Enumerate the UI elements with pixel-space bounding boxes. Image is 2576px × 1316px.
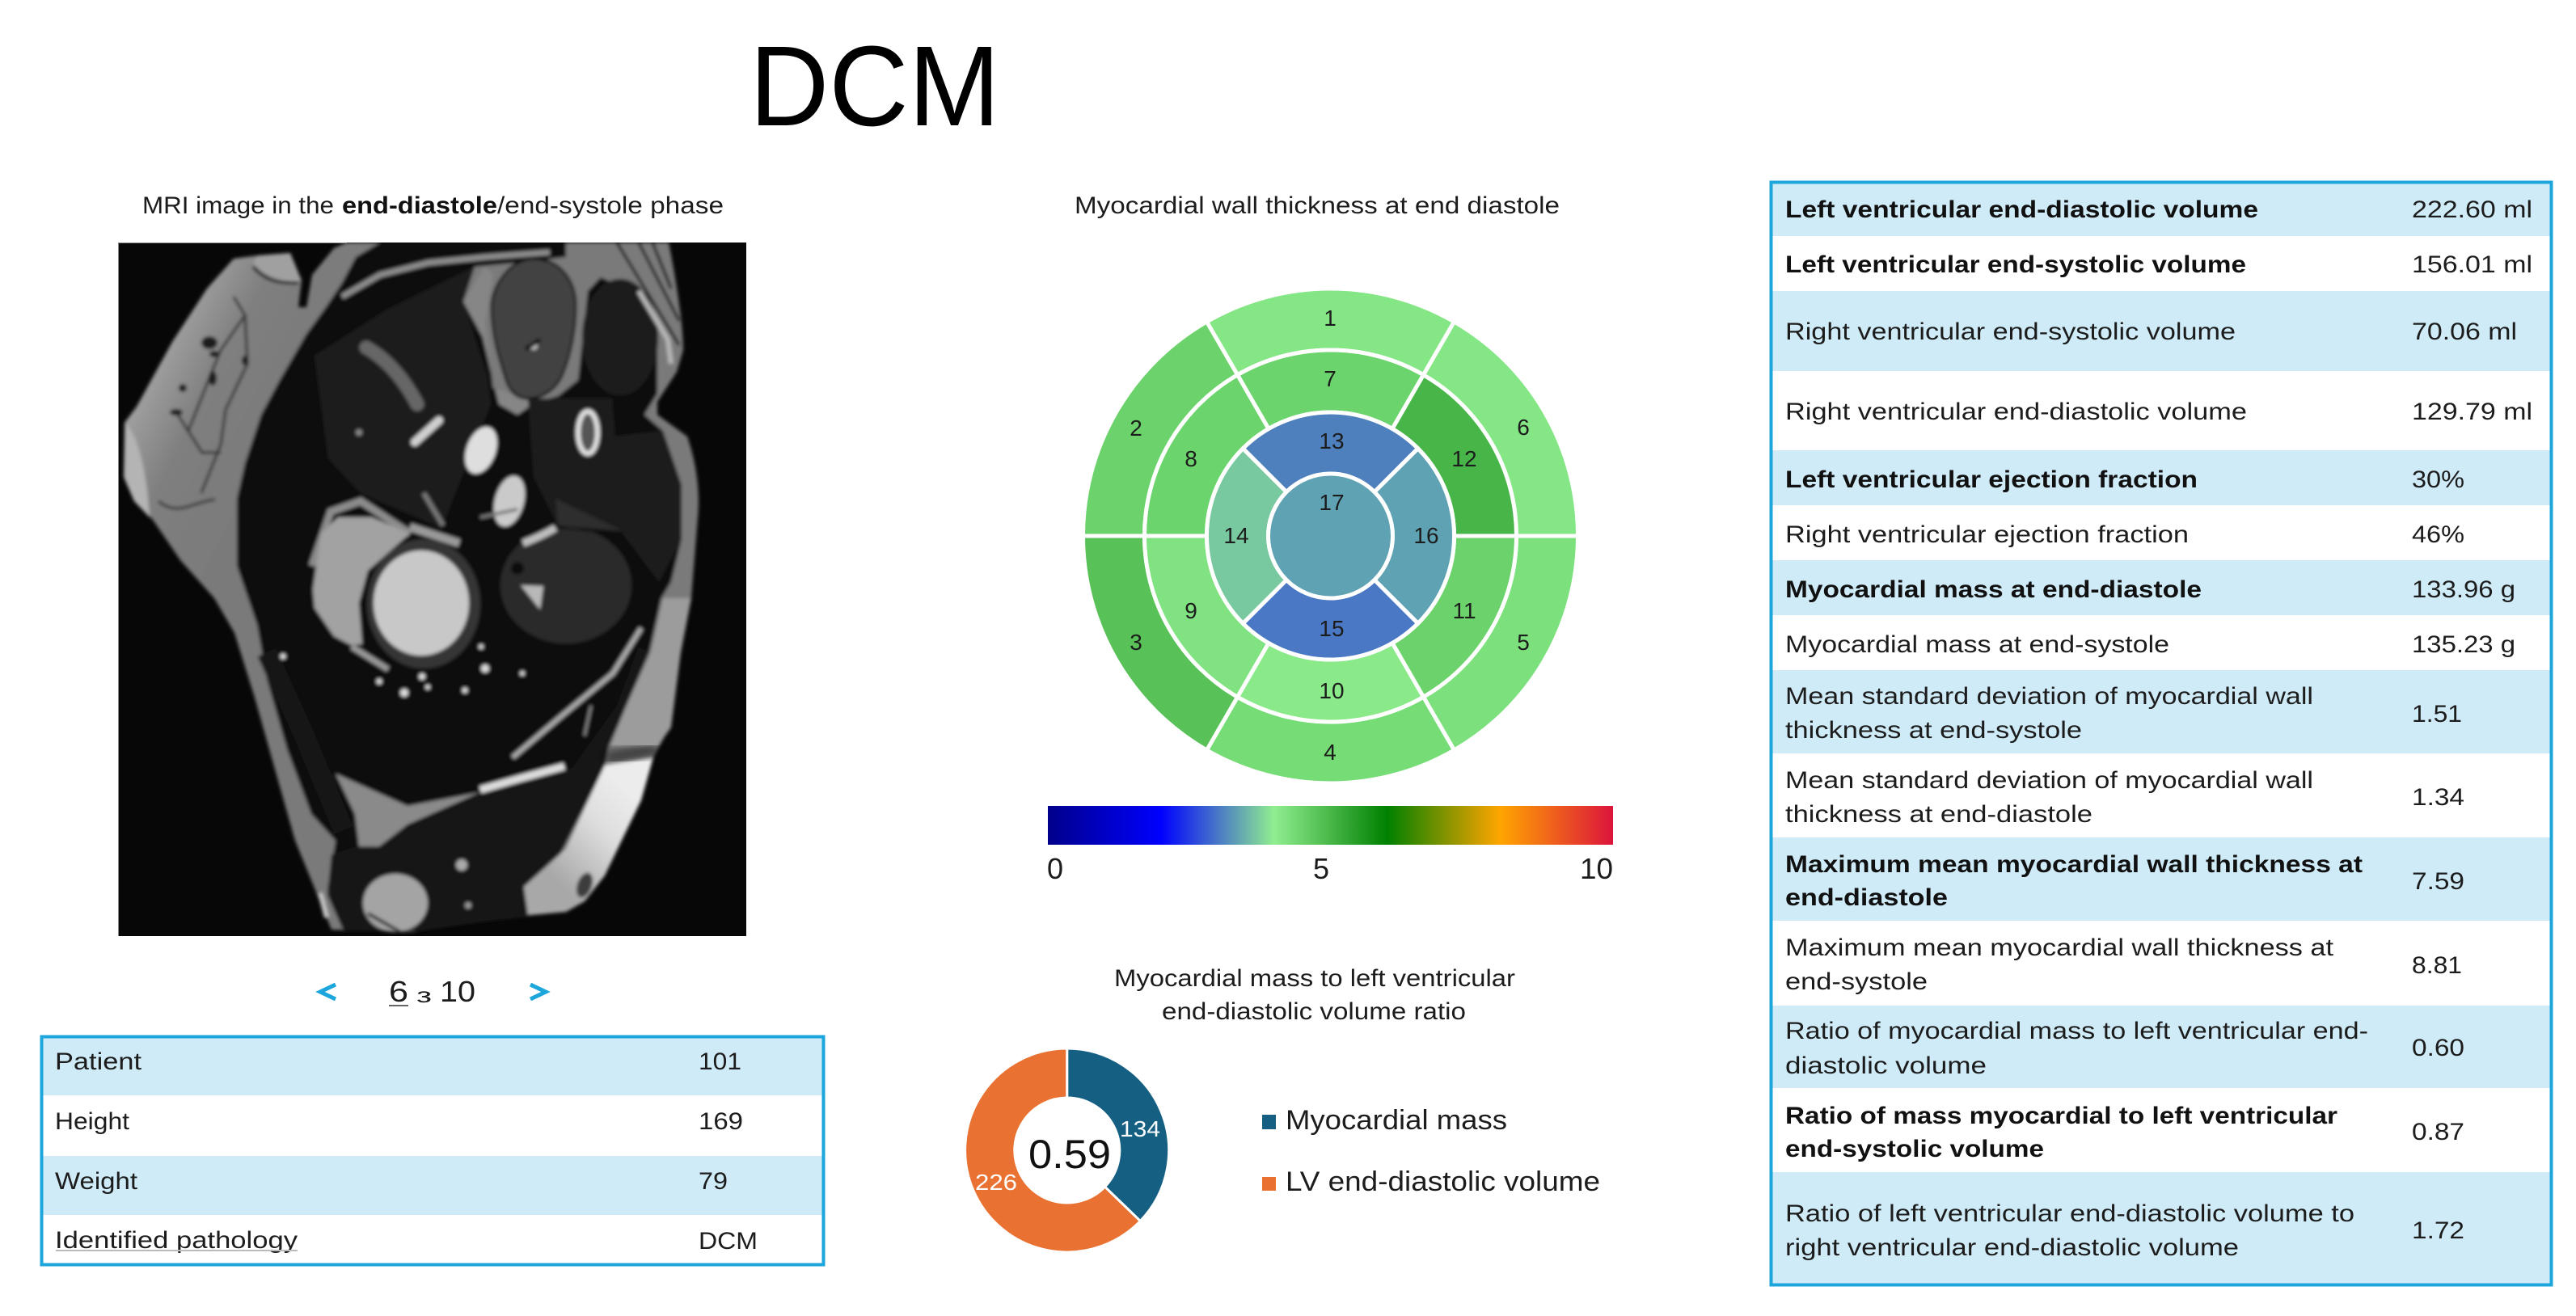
patient table: Height [55, 1108, 130, 1135]
metrics values: 1.51 [2412, 701, 2462, 728]
segment numbers: 6 [1517, 415, 1530, 440]
metrics labels: Maximum mean myocardial wall thickness at [1785, 934, 2334, 961]
donut slice: myocardial mass [1067, 1048, 1169, 1221]
metrics labels: Left ventricular end-diastolic volume [1785, 196, 2258, 223]
segment numbers: 12 [1451, 446, 1477, 471]
heading: MRI image: /end-systole phase [497, 192, 724, 219]
heading: MRI image: MRI image in the [142, 192, 334, 219]
segment numbers [1130, 306, 1530, 765]
pager count: 6 [389, 975, 408, 1008]
metrics labels: Ratio of myocardial mass to left ventricular end- [1785, 1018, 2368, 1044]
metrics values: 1.34 [2412, 784, 2464, 811]
bullseye chart [1083, 289, 1578, 783]
segment numbers: 13 [1319, 428, 1345, 453]
metrics labels: Myocardial mass at end-diastole [1785, 576, 2202, 603]
metrics values: 70.06 ml [2412, 318, 2517, 345]
metrics labels: diastolic volume [1785, 1052, 1987, 1079]
colour scale: 5 [1313, 852, 1329, 885]
heading: mass ratio [1114, 965, 1515, 1025]
metrics values: 222.60 ml [2412, 196, 2532, 223]
pager count: з [416, 983, 432, 1007]
metrics labels: Mean standard deviation of myocardial wall [1785, 683, 2313, 710]
donut chart [965, 1048, 1169, 1252]
segment numbers: 16 [1413, 523, 1439, 548]
metrics values: 46% [2412, 521, 2464, 548]
metrics labels: Left ventricular end-systolic volume [1785, 251, 2246, 278]
segment numbers: 2 [1130, 415, 1142, 441]
metrics values: 133.96 g [2412, 576, 2515, 603]
metrics labels: end-systolic volume [1785, 1136, 2044, 1162]
donut slice: LV end-diastolic volume [965, 1048, 1140, 1252]
title: DCM [750, 22, 1000, 150]
patient table [40, 1036, 825, 1266]
metrics labels: Left ventricular ejection fraction [1785, 466, 2198, 493]
donut legend [1262, 1105, 1600, 1197]
segment numbers: 8 [1185, 446, 1197, 471]
segment numbers: 17 [1319, 490, 1345, 515]
segment numbers: 7 [1324, 366, 1337, 391]
heading: mass ratio: Myocardial mass to left ventricular [1114, 965, 1515, 992]
metrics values: 30% [2412, 466, 2464, 493]
segment numbers: 3 [1130, 630, 1142, 655]
pager previous arrow [320, 985, 336, 999]
metrics labels: Ratio of mass myocardial to left ventricular [1785, 1103, 2337, 1129]
metrics labels: Ratio of left ventricular end-diastolic volume to [1785, 1200, 2354, 1227]
metrics labels: thickness at end-systole [1785, 717, 2082, 744]
metrics labels: Right ventricular ejection fraction [1785, 521, 2189, 548]
pager count [389, 975, 475, 1008]
middle ring segments [1145, 350, 1517, 722]
outer ring segments [1083, 289, 1578, 783]
patient table: Weight [55, 1168, 138, 1195]
apex segment [1268, 474, 1392, 598]
metrics labels: Right ventricular end-diastolic volume [1785, 399, 2247, 425]
metrics values: 135.23 g [2412, 631, 2515, 658]
donut slice values: 226 [975, 1170, 1017, 1195]
pager count: 10 [440, 975, 475, 1008]
pager next arrow [530, 985, 546, 999]
segment numbers: 11 [1452, 598, 1476, 623]
patient table: DCM [699, 1228, 758, 1255]
metrics labels: Mean standard deviation of myocardial wall [1785, 767, 2313, 794]
inner ring segments [1206, 412, 1455, 660]
segment numbers: 9 [1185, 598, 1197, 623]
metrics labels [1785, 196, 2368, 1261]
patient table: 79 [699, 1168, 728, 1195]
patient table: 169 [699, 1108, 743, 1135]
MRI scan image [118, 243, 746, 936]
colour scale: 0 [1047, 852, 1063, 885]
metrics values: 129.79 ml [2412, 399, 2532, 425]
segment numbers: 1 [1324, 306, 1337, 331]
patient table: Patient [55, 1048, 142, 1075]
colour scale: 10 [1580, 852, 1613, 885]
segment numbers: 5 [1517, 630, 1530, 655]
segment numbers: 4 [1324, 740, 1337, 765]
metrics values: 1.72 [2412, 1217, 2464, 1244]
metrics labels: Right ventricular end-systolic volume [1785, 318, 2236, 345]
donut legend: Myocardial mass [1286, 1105, 1507, 1136]
donut slice values: 134 [1120, 1116, 1160, 1141]
donut centre value: 0.59 [1028, 1132, 1111, 1177]
metrics labels: end-systole [1785, 968, 1928, 995]
metrics values: 7.59 [2412, 868, 2464, 895]
metrics labels: end-diastole [1785, 884, 1948, 911]
metrics labels: right ventricular end-diastolic volume [1785, 1234, 2239, 1261]
patient table: Identified pathology [55, 1227, 298, 1254]
heading: MRI image [142, 192, 724, 219]
segment numbers: 15 [1319, 616, 1345, 641]
metrics labels: thickness at end-diastole [1785, 801, 2092, 828]
metrics values: 0.87 [2412, 1119, 2464, 1145]
heading: wall thickness: Myocardial wall thickness at end diastole [1075, 192, 1560, 219]
metrics values: 156.01 ml [2412, 251, 2532, 278]
donut legend: LV end-diastolic volume [1286, 1166, 1600, 1197]
heading: MRI image: end-diastole [342, 192, 497, 219]
donut slice values [975, 1116, 1160, 1195]
segment numbers: 10 [1319, 678, 1345, 703]
patient table: 101 [699, 1048, 741, 1075]
metrics values: 0.60 [2412, 1035, 2464, 1061]
metrics table [1770, 181, 2553, 1286]
segment numbers: 14 [1223, 523, 1249, 548]
metrics values [2412, 196, 2532, 1244]
heading: mass ratio: end-diastolic volume ratio [1162, 998, 1466, 1025]
metrics labels: Myocardial mass at end-systole [1785, 631, 2169, 658]
pager [320, 975, 546, 1008]
metrics values: 8.81 [2412, 952, 2462, 979]
metrics labels: Maximum mean myocardial wall thickness at [1785, 851, 2363, 878]
colour scale [1047, 806, 1613, 885]
